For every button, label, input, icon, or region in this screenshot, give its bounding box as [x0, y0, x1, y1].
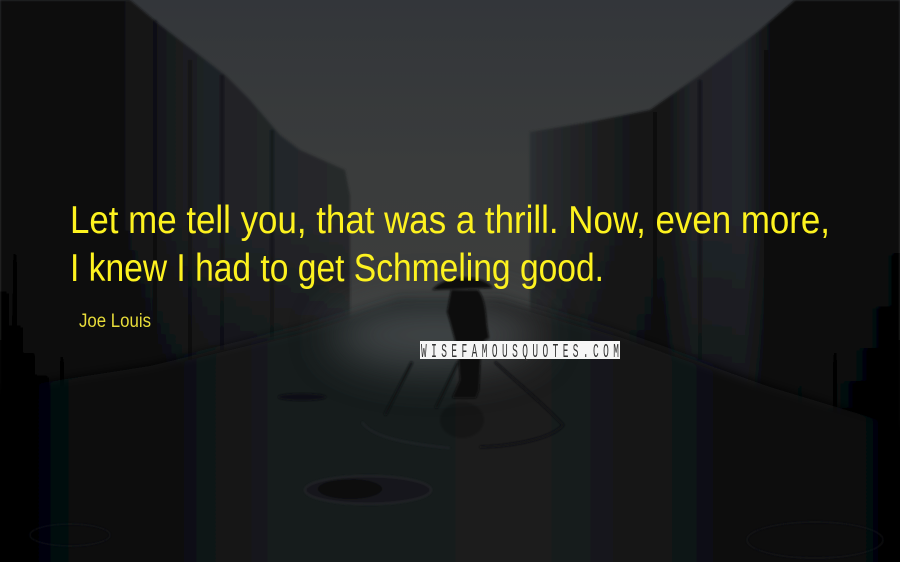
quote text [70, 199, 830, 290]
quote text: Let me tell you, that was a thrill. Now, even more, [70, 199, 830, 242]
background: right row of buildings [530, 0, 900, 450]
author: Joe Louis [79, 311, 151, 332]
quote text: I knew I had to get Schmeling good. [70, 247, 604, 290]
background: overcast sky [0, 0, 900, 340]
watermark badge: WISEFAMOUSQUOTES.COM [421, 341, 619, 363]
background: wet road [0, 298, 900, 562]
background: left row of buildings [0, 0, 350, 410]
road markings and puddles [30, 362, 883, 558]
figure walking with umbrella [432, 277, 493, 438]
soft light on road [330, 301, 540, 369]
